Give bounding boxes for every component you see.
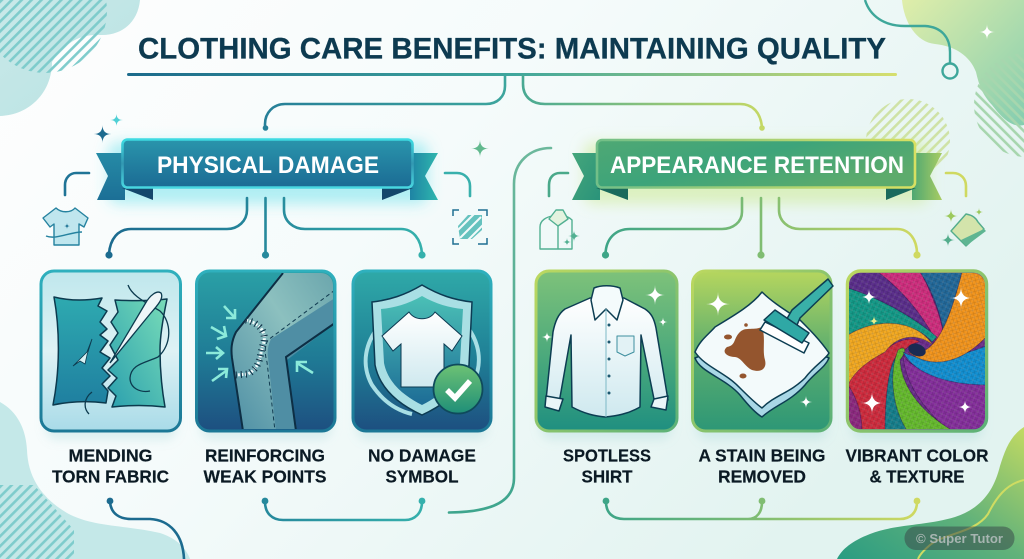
icon: protective fabric swatch — [453, 210, 487, 244]
illustration: shield — [366, 285, 479, 415]
connector: title to appearance retention — [523, 76, 765, 131]
label: no damage symbol: SYMBOL — [386, 466, 459, 486]
card: a stain being removed — [692, 271, 833, 431]
illustration: jeans knee — [231, 271, 335, 431]
icon: torn t-shirt — [43, 208, 88, 245]
card shadows — [45, 290, 983, 440]
watermark: © Super Tutor — [916, 532, 1003, 546]
bottom connector: reinforcing and no damage — [262, 498, 425, 520]
label: reinforcing weak points: REINFORCING — [205, 446, 325, 466]
title rule — [127, 73, 897, 76]
side connectors — [65, 173, 966, 196]
label: a stain being removed: REMOVED — [718, 466, 806, 486]
label: vibrant color and texture: VIBRANT COLOR — [846, 446, 989, 466]
banner label: physical damage: PHYSICAL DAMAGE — [157, 152, 379, 179]
watermark — [904, 526, 1014, 550]
icon: clean shirt — [540, 210, 580, 249]
sparkles: physical damage — [94, 114, 489, 158]
label: spotless shirt: SPOTLESS — [563, 446, 651, 466]
icon: sparkling cloth — [941, 208, 986, 247]
illustration: colorful knit swirl — [848, 272, 988, 432]
label: a stain being removed: A STAIN BEING — [698, 446, 826, 466]
illustration: small tear — [73, 339, 92, 366]
title: CLOTHING CARE BENEFITS: MAINTAINING QUALITY — [138, 32, 886, 66]
divider connector between sections — [449, 148, 551, 512]
illustration: left fabric — [53, 297, 110, 405]
decorative blob bottom left — [0, 402, 190, 559]
label: vibrant color and texture: & TEXTURE — [870, 466, 964, 486]
card: spotless shirt — [536, 271, 677, 431]
card: vibrant color and texture — [848, 271, 988, 432]
card: no damage symbol — [353, 271, 491, 431]
illustration: cloth — [695, 292, 829, 417]
decorative blob top left — [0, 0, 140, 116]
illustration: thread — [85, 285, 169, 414]
illustration: sparkles — [542, 285, 668, 342]
banner: physical damage — [96, 140, 438, 204]
banner: appearance retention — [572, 140, 942, 204]
connectors: appearance retention to cards — [602, 198, 921, 259]
decorative connector with ring — [865, 0, 958, 78]
illustration: needle — [110, 292, 162, 363]
label: spotless shirt: SHIRT — [582, 466, 633, 486]
label: reinforcing weak points: WEAK POINTS — [204, 466, 326, 486]
banner label: appearance retention: APPEARANCE RETENTION — [610, 152, 904, 179]
card: mending torn fabric — [41, 271, 180, 431]
bottom connector: mending — [107, 498, 184, 559]
illustration: white t-shirt — [382, 312, 462, 387]
connector: title to physical damage — [263, 76, 505, 131]
label: mending torn fabric: MENDING — [68, 446, 152, 466]
illustration: sparkles — [861, 287, 972, 414]
decorative blob bottom right — [837, 427, 1024, 559]
illustration: right fabric — [108, 299, 167, 407]
illustration: brown stain — [724, 323, 765, 378]
illustration: sparkles — [706, 292, 812, 408]
illustration: green check badge — [434, 364, 482, 414]
connectors: physical damage to cards — [105, 198, 426, 259]
illustration: shirt buttons — [608, 324, 610, 394]
label: mending torn fabric: TORN FABRIC — [52, 466, 169, 486]
bottom connector: appearance retention cards — [603, 498, 920, 519]
card: reinforcing weak points — [196, 271, 335, 431]
illustration: white shirt — [545, 286, 668, 417]
label: no damage symbol: NO DAMAGE — [368, 446, 476, 466]
illustration: brush — [760, 279, 833, 353]
decorative blob top right — [866, 0, 1024, 183]
illustration: pressure arrows — [206, 306, 313, 381]
